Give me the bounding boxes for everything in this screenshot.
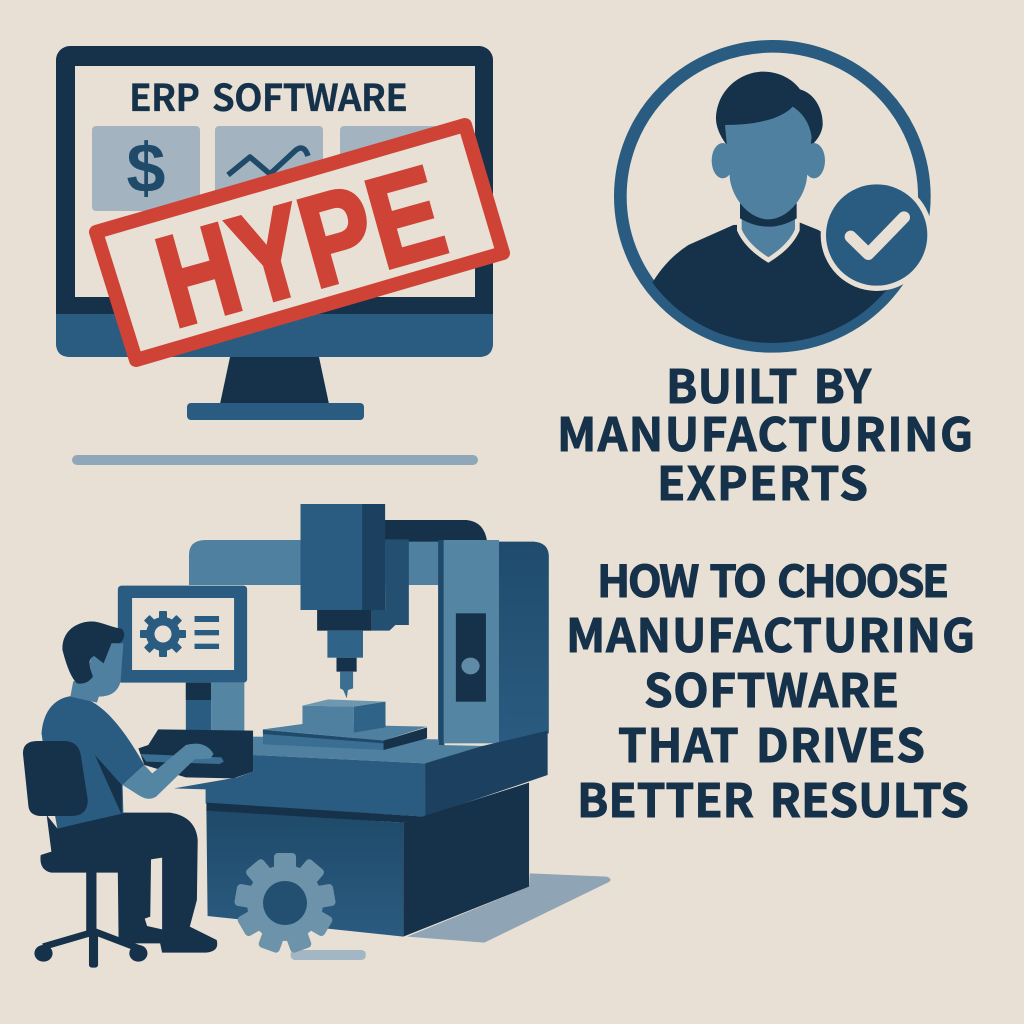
icon: ERP monitor with HYPE stamp	[56, 46, 503, 420]
ears	[712, 143, 734, 178]
heading: built by manufacturing experts	[557, 351, 973, 514]
monitor chin	[56, 314, 493, 357]
heading: how to choose: HOW TO CHOOSE	[597, 546, 949, 610]
control monitor stand	[186, 683, 244, 731]
heading: built by manufacturing experts: MANUFACTURING	[557, 399, 973, 465]
shirt	[42, 696, 144, 828]
dark top rail	[384, 520, 487, 542]
HYPE stamp	[96, 125, 503, 360]
stamp word: HYPE	[143, 139, 459, 355]
machine arm	[189, 540, 443, 585]
shirt fold	[95, 755, 122, 815]
gear icon	[234, 853, 336, 954]
control monitor	[118, 586, 247, 683]
workpiece block	[302, 699, 386, 733]
screen heading: ERP SOFTWARE	[129, 68, 408, 122]
divider bar	[72, 455, 478, 465]
icon: expert portrait	[620, 46, 933, 357]
monitor stand	[220, 357, 329, 404]
leg gap	[145, 858, 162, 929]
chair post and base	[34, 870, 147, 968]
tile: dollar: $	[127, 129, 165, 207]
check badge	[821, 179, 933, 291]
monitor body	[56, 46, 493, 357]
tile: hidden	[340, 126, 448, 211]
portrait ring	[620, 46, 924, 346]
machine table	[174, 731, 548, 817]
heading: how to choose: MANUFACTURING	[566, 600, 975, 666]
menu lines	[195, 616, 219, 622]
floor shadow	[407, 873, 610, 943]
workpiece plate	[263, 724, 427, 750]
monitor screen	[75, 66, 475, 297]
neck	[739, 217, 797, 260]
heading: how to choose	[566, 546, 975, 831]
shoulders	[652, 222, 886, 343]
heading: how to choose: BETTER RESULTS	[577, 765, 969, 831]
keyboard console	[138, 729, 253, 778]
collar band	[740, 203, 797, 227]
spindle head	[301, 504, 409, 698]
heading: how to choose: THAT DRIVES	[618, 710, 925, 776]
column panel	[456, 613, 486, 702]
machine column	[438, 540, 549, 747]
chair back	[23, 741, 88, 816]
hair	[62, 621, 124, 684]
heading: built by manufacturing experts: BUILT BY	[666, 351, 871, 417]
tile: trend chart	[215, 126, 323, 211]
heading: built by manufacturing experts: EXPERTS	[657, 448, 868, 514]
monitor base	[187, 403, 364, 420]
heading: how to choose: SOFTWARE	[644, 655, 899, 721]
illustration: CNC machine and operator	[23, 504, 610, 968]
operator	[23, 621, 217, 968]
machine base	[206, 783, 529, 937]
forearm	[123, 744, 214, 799]
small pad under gear	[291, 950, 366, 960]
gear on control screen	[140, 611, 186, 657]
face	[725, 107, 812, 219]
tile: dollar	[92, 126, 200, 211]
trousers and seat	[40, 813, 217, 953]
hair	[716, 72, 823, 147]
face and neck	[70, 643, 123, 703]
